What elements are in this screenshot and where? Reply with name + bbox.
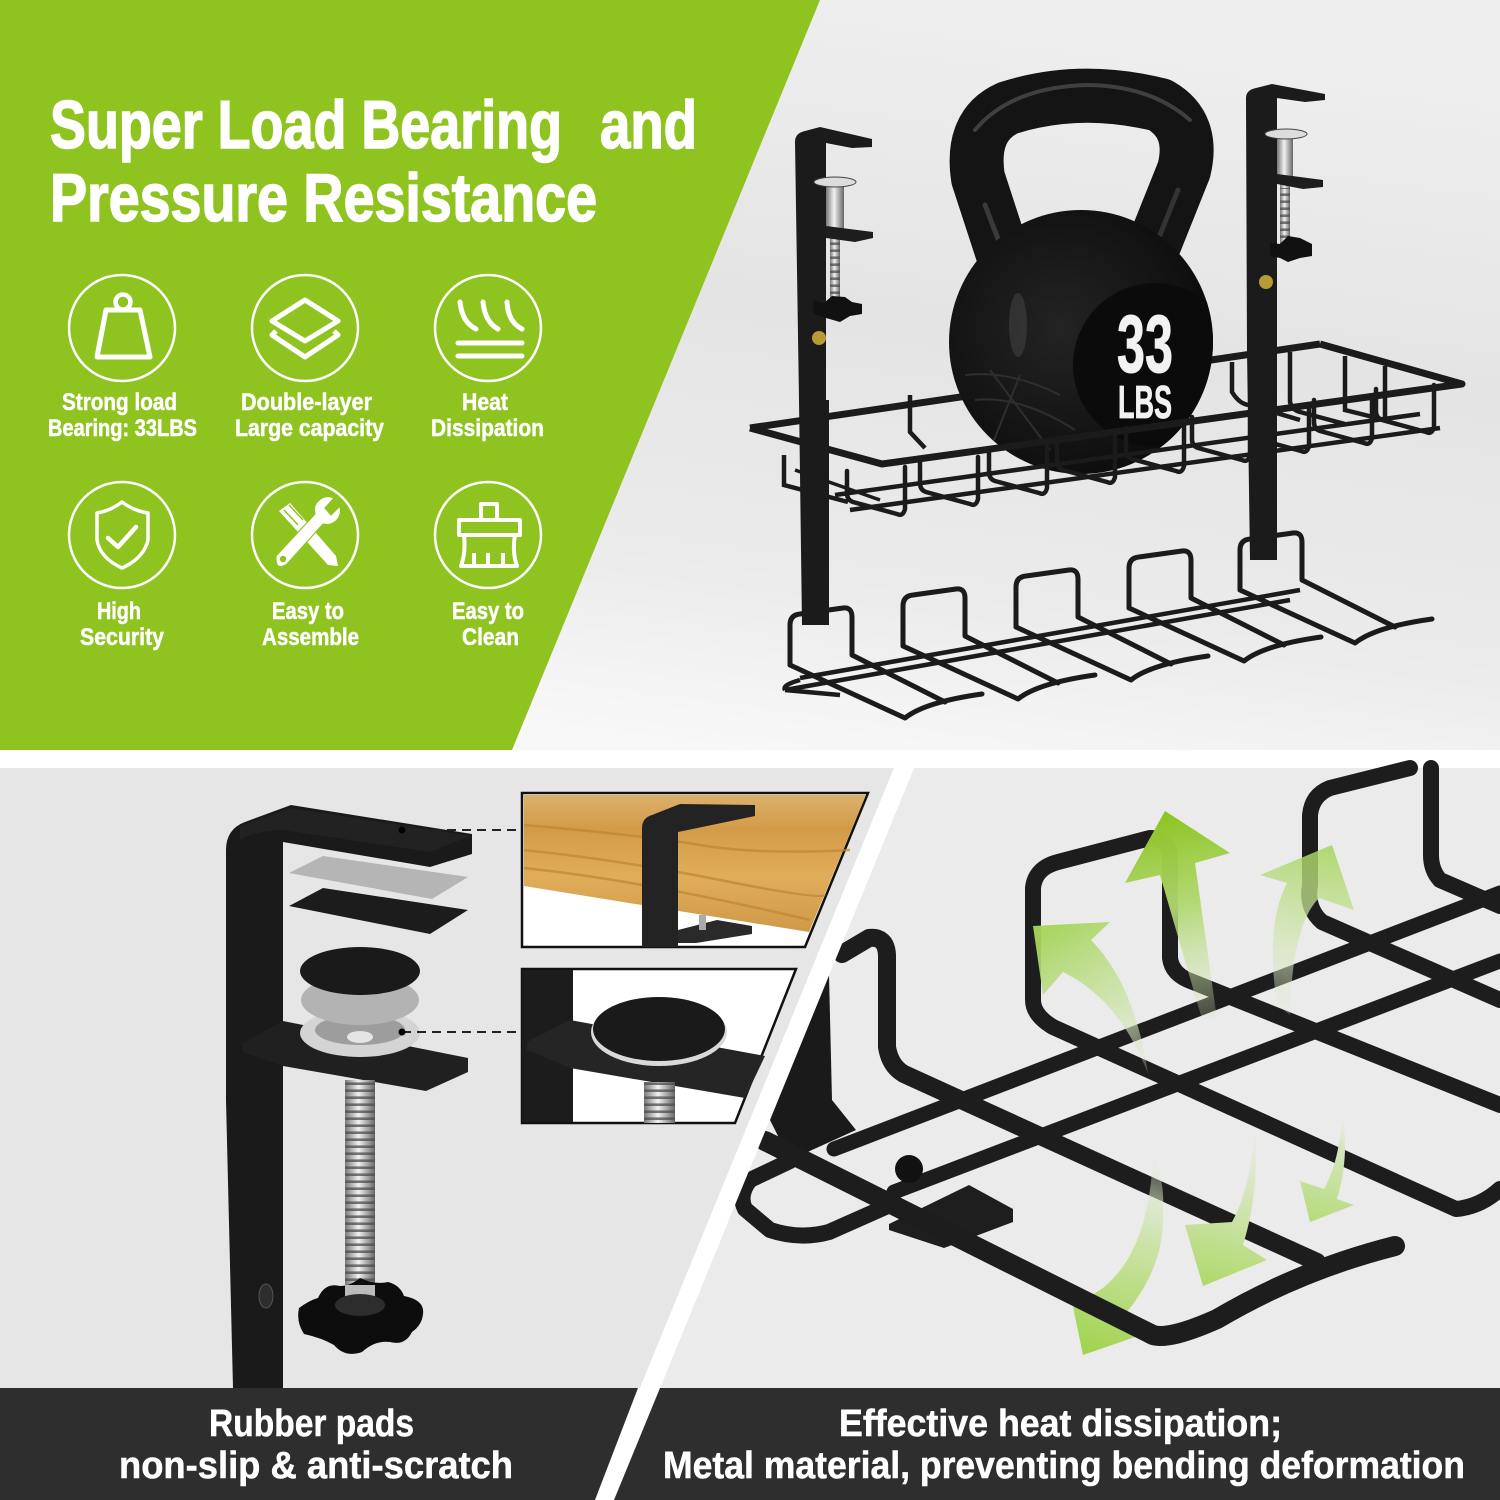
left upright — [795, 127, 872, 625]
label: easy to clean — [452, 598, 524, 651]
green title panel — [0, 0, 820, 750]
icon: weight — [69, 275, 175, 381]
label: heat dissipation: Dissipation — [431, 415, 544, 442]
title: Super Load Bearing — [50, 87, 562, 163]
arrow: left up — [1033, 922, 1148, 1074]
label: easy to assemble — [262, 598, 359, 651]
arrow: bottom right — [1300, 1114, 1354, 1222]
title — [50, 87, 697, 236]
gray pad — [289, 856, 468, 899]
white band — [0, 750, 1500, 768]
kettlebell ball — [949, 210, 1213, 474]
star knob — [298, 1278, 423, 1354]
arrow: right up — [1260, 845, 1354, 1015]
title: Pressure Resistance — [50, 160, 597, 236]
inset: bracket on wood — [522, 793, 868, 947]
caption bar: heat dissipation — [614, 1388, 1500, 1500]
plate and bolt — [889, 1155, 1013, 1248]
lower cable hooks — [785, 533, 1432, 718]
arrow: bottom center — [1185, 1126, 1267, 1286]
kettlebell handle — [977, 96, 1187, 270]
lower clamp — [678, 920, 752, 943]
title: and — [600, 87, 697, 163]
diagonal divider — [640, 768, 914, 1388]
arrow: center up — [1125, 811, 1230, 1019]
icon: layers — [252, 275, 358, 381]
label: heat dissipation — [431, 389, 544, 442]
label: easy to clean: Easy to — [452, 598, 524, 625]
label: high security: Security — [80, 624, 165, 651]
black pad — [289, 888, 468, 934]
label: double layer: Double-layer — [241, 389, 372, 416]
black disc — [300, 947, 420, 995]
gray disc — [301, 975, 419, 1025]
left clamp — [812, 177, 873, 345]
kettlebell highlight — [975, 85, 1190, 270]
inset: disc close-up — [522, 969, 796, 1123]
caption bar: rubber pads — [0, 1388, 638, 1500]
icon: heat — [435, 275, 541, 381]
rails and wires — [742, 768, 1500, 1262]
mounting bracket — [770, 975, 856, 1160]
mounting hole — [259, 1284, 273, 1308]
bracket upper face — [240, 808, 470, 852]
right upright — [1246, 84, 1325, 560]
top panel background — [0, 0, 1500, 750]
kettlebell number — [1117, 299, 1173, 428]
panel: rubber pads background — [0, 768, 894, 1388]
label: easy to clean: Clean — [462, 624, 519, 651]
icon: tools — [252, 482, 358, 588]
callout line lower — [398, 1028, 521, 1036]
caption bar: heat dissipation: Effective heat dissipation; — [839, 1403, 1282, 1445]
label: double layer — [235, 389, 385, 442]
right clamp — [1259, 129, 1323, 289]
wood board — [524, 795, 866, 932]
icon: brush — [435, 482, 541, 588]
kettlebell number: 33 — [1117, 299, 1173, 390]
arrow: bottom left — [1073, 1153, 1163, 1355]
caption bar: rubber pads: non-slip & anti-scratch — [119, 1445, 513, 1487]
screw — [345, 1080, 375, 1285]
label: easy to assemble: Easy to — [272, 598, 344, 625]
ball reflections — [965, 283, 1237, 450]
label: easy to assemble: Assemble — [262, 624, 359, 651]
bracket on wood — [642, 804, 755, 947]
label: high security: High — [97, 598, 141, 625]
heat dissipation wire rack — [742, 768, 1500, 1355]
lower arm — [243, 1021, 468, 1091]
label: strong load: Bearing: 33LBS — [48, 415, 197, 442]
bracket exploded diagram — [226, 805, 521, 1388]
caption bar: rubber pads: Rubber pads — [209, 1403, 414, 1445]
caption bar: heat dissipation: Metal material, preventing bending deformation — [663, 1445, 1465, 1487]
steel washer — [300, 1009, 420, 1057]
icon: shield — [69, 482, 175, 588]
callout line top — [398, 826, 521, 834]
label: heat dissipation: Heat — [462, 389, 508, 416]
label: double layer: Large capacity — [235, 415, 385, 442]
product: rack with kettlebell — [750, 84, 1462, 718]
front wire — [765, 1141, 1395, 1336]
panel: heat dissipation background — [660, 768, 1500, 1388]
label: strong load: Strong load — [62, 389, 177, 416]
bracket body — [226, 805, 472, 1388]
label: high security — [80, 598, 165, 651]
kettlebell number: LBS — [1118, 376, 1172, 428]
shelf back rail and rear wires — [750, 344, 1385, 448]
label: strong load — [48, 389, 197, 442]
upper shelf basket — [750, 344, 1462, 515]
